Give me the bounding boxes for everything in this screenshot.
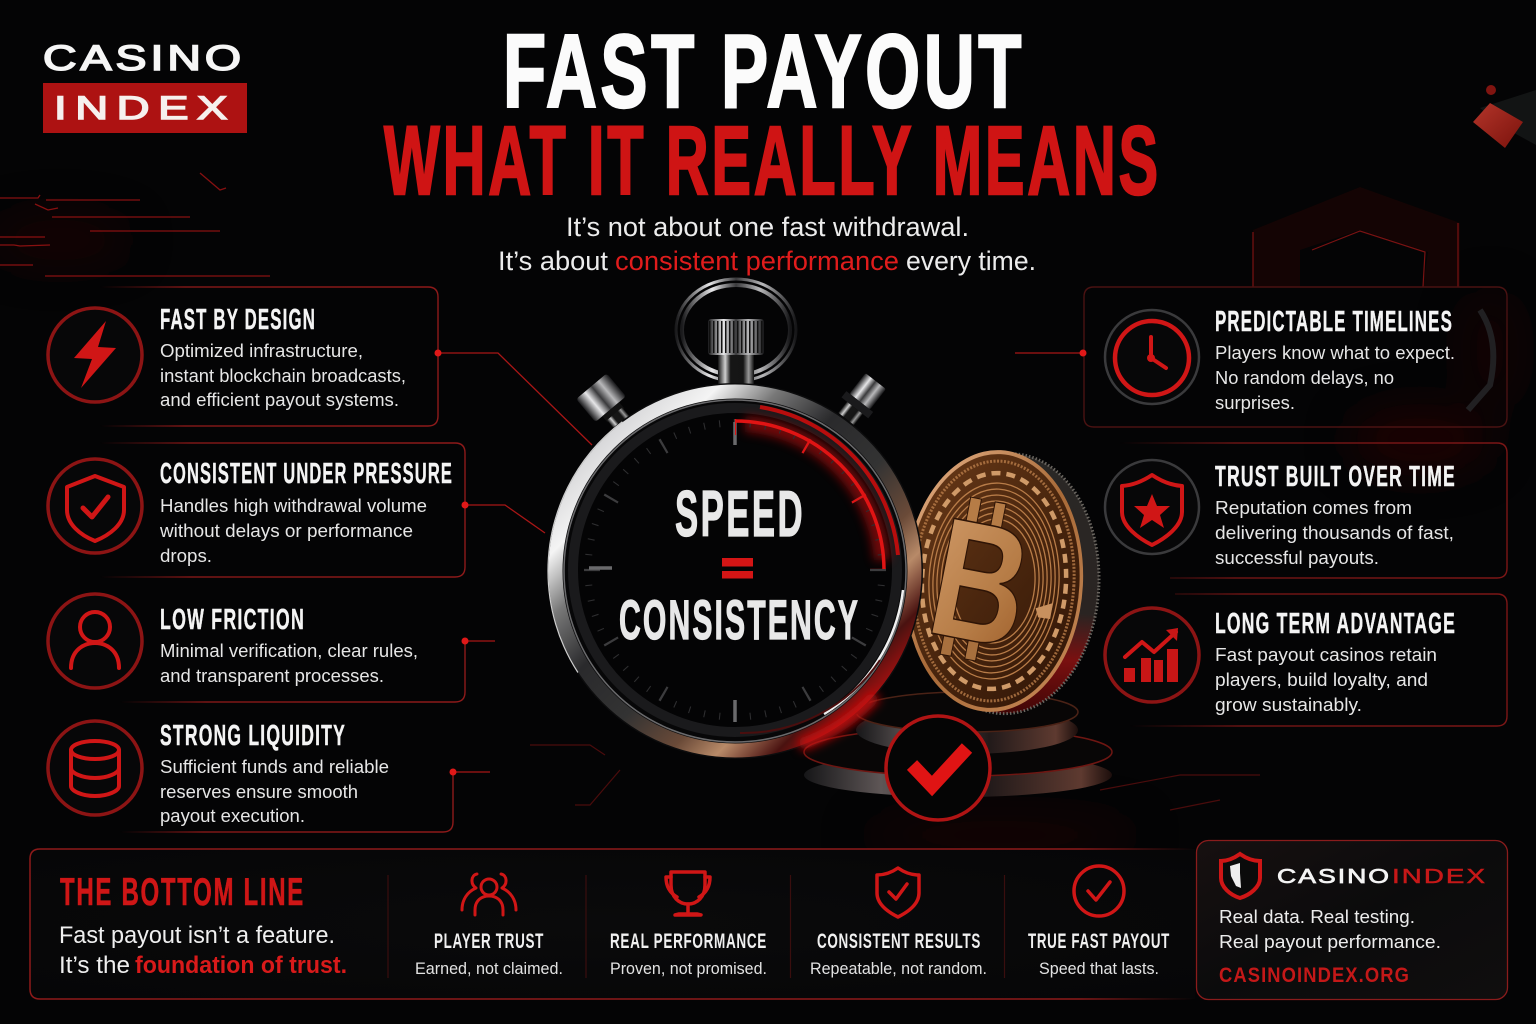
inner red reflection (760, 407, 898, 555)
subtitle: consistent performance (615, 246, 899, 276)
logo: CASINO (43, 39, 245, 78)
text: STRONG LIQUIDITY (160, 720, 346, 752)
card: low friction (48, 594, 468, 702)
card: fast by design (48, 287, 442, 426)
text (1215, 608, 1456, 715)
item: player trust: Earned, not claimed. (415, 960, 563, 978)
left pusher (576, 373, 639, 437)
heading: THE BOTTOM LINE (60, 871, 305, 914)
text: Minimal verification, clear rules, (160, 640, 418, 661)
text: players, build loyalty, and (1215, 669, 1428, 690)
text: successful payouts. (1215, 547, 1379, 568)
item: true fast payout: TRUE FAST PAYOUT (1028, 929, 1170, 953)
icon: lightning (48, 308, 142, 402)
text: Handles high withdrawal volume (160, 495, 427, 516)
dial ticks (588, 423, 882, 717)
item: true fast payout (1028, 866, 1170, 978)
connector dot (462, 502, 468, 508)
panel: brand card (1196, 840, 1508, 1000)
item: consistent results (810, 868, 987, 978)
dividers (388, 875, 1004, 978)
text: delivering thousands of fast, (1215, 522, 1454, 543)
centre text: CONSISTENCY (619, 588, 860, 651)
text: reserves ensure smooth (160, 781, 358, 802)
icon: clock (1105, 310, 1199, 404)
item: player trust (415, 874, 563, 978)
item: player trust: PLAYER TRUST (434, 929, 544, 953)
dark right chip decoration (1468, 310, 1493, 410)
text: Fast payout casinos retain (1215, 644, 1437, 665)
statement: foundation of trust. (135, 952, 347, 979)
text: Sufficient funds and reliable (160, 756, 389, 777)
tagline: Real data. Real testing. (1219, 906, 1415, 927)
decorative shield outline, right (1253, 187, 1460, 287)
text (160, 604, 418, 686)
icon: database (48, 721, 142, 815)
logo (43, 39, 247, 133)
icon: shield star (1105, 460, 1199, 554)
icon: growth chart (1105, 608, 1199, 702)
check badge (886, 716, 990, 820)
text (159, 458, 453, 566)
connector dot (462, 638, 468, 644)
statement: Fast payout isn’t a feature. (59, 922, 335, 949)
thin white highlight, lower right (824, 590, 903, 714)
text: CONSISTENT UNDER PRESSURE (160, 458, 453, 490)
text: LOW FRICTION (160, 604, 305, 636)
card: long term advantage (1105, 594, 1507, 726)
brand name: INDEX (1392, 866, 1487, 888)
lower-centre hex traces (530, 745, 1260, 810)
connector dot (450, 768, 456, 776)
connector lines (438, 353, 1084, 772)
red glow (745, 424, 882, 560)
item: real performance (610, 872, 767, 978)
centre text (619, 477, 860, 651)
logo: INDEX (54, 90, 236, 126)
text: and transparent processes. (160, 665, 384, 686)
text: FAST BY DESIGN (160, 304, 316, 336)
bezel red reflection (800, 695, 876, 745)
text (160, 304, 406, 410)
item: consistent results: CONSISTENT RESULTS (817, 929, 981, 953)
subtitle: It’s not about one fast withdrawal. (566, 212, 969, 242)
dim red haze (0, 218, 1520, 853)
statement: It’s the (59, 952, 130, 979)
text: Optimized infrastructure, (160, 340, 363, 361)
cardinal ticks (589, 422, 735, 722)
brand name: CASINO (1277, 866, 1391, 888)
subtitle: every time. (906, 246, 1036, 276)
icon: shield check (48, 459, 142, 553)
red circuit traces, left (0, 173, 270, 276)
title (384, 14, 1161, 215)
decorative red shard, top right (1473, 85, 1536, 148)
text: grow sustainably. (1215, 694, 1362, 715)
text: surprises. (1215, 392, 1295, 413)
item: real performance: Proven, not promised. (610, 960, 767, 978)
text: Reputation comes from (1215, 497, 1412, 518)
item: real performance: REAL PERFORMANCE (610, 929, 767, 953)
red arc (735, 419, 886, 569)
text: payout execution. (160, 805, 305, 826)
subtitle (498, 212, 1036, 276)
text: and efficient payout systems. (160, 389, 399, 410)
text: without delays or performance (159, 520, 413, 541)
text (1215, 306, 1455, 413)
item: consistent results: Repeatable, not random. (810, 960, 987, 978)
text: instant blockchain broadcasts, (160, 365, 406, 386)
right pusher (833, 371, 889, 429)
statement (59, 922, 347, 979)
card: predictable timelines (1080, 287, 1507, 427)
card: consistent under pressure (48, 443, 468, 577)
tagline (1219, 906, 1441, 952)
platform discs (804, 692, 1112, 797)
text (160, 720, 389, 826)
crown ring (676, 279, 796, 381)
centre text: SPEED (675, 477, 805, 550)
item: true fast payout: Speed that lasts. (1039, 960, 1159, 978)
brand name (1277, 866, 1487, 888)
stopwatch (547, 279, 923, 759)
text: drops. (160, 545, 212, 566)
connector dot (1080, 350, 1086, 356)
bitcoin coin (898, 446, 1106, 718)
text: Players know what to expect. (1215, 342, 1455, 363)
coin face (898, 446, 1090, 716)
crown stem (718, 354, 754, 386)
subtitle: It’s about (498, 246, 608, 276)
card: strong liquidity (48, 720, 456, 832)
text (1215, 461, 1456, 568)
title: FAST PAYOUT (503, 14, 1025, 130)
text: No random delays, no (1215, 367, 1394, 388)
connector dot (434, 350, 442, 356)
inner dark ring (573, 408, 897, 732)
tagline: Real payout performance. (1219, 931, 1441, 952)
bitcoin symbol: B (916, 481, 1045, 686)
coin edge (910, 449, 1106, 718)
panel: bottom line (30, 849, 1195, 999)
card: trust built over time (1105, 443, 1507, 578)
icon: person (48, 594, 142, 688)
case (547, 383, 923, 759)
crown knob (708, 319, 764, 355)
icon: brand shield (1221, 854, 1260, 898)
website: CASINOINDEX.ORG (1219, 964, 1410, 987)
